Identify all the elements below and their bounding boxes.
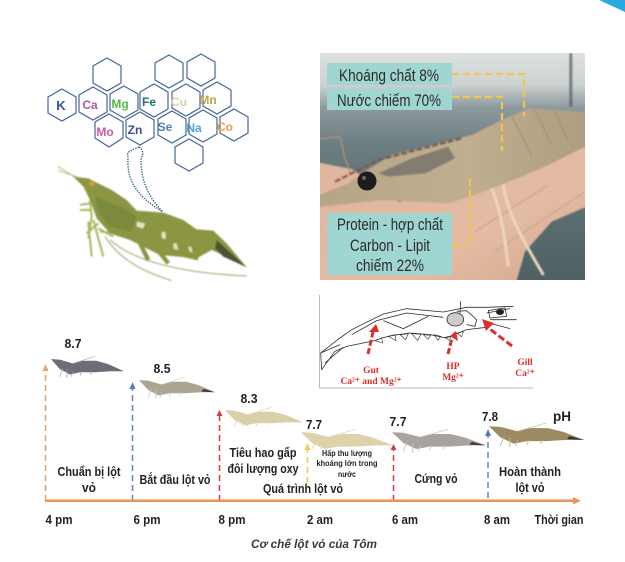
icon: shrimp 7.7 grey (392, 429, 486, 453)
dashed stage arrows (46, 369, 488, 501)
stage labels: lột vỏ (516, 481, 545, 495)
pH values: 8.5 (154, 362, 171, 376)
caption: Cơ chế lột vỏ của Tôm (251, 537, 377, 551)
panel: mineral hexagons (48, 54, 248, 171)
stage labels: Chuẩn bị lột (58, 465, 121, 479)
label: Gut (340, 366, 402, 387)
element labels: K (56, 98, 66, 113)
element labels: Mn (199, 93, 217, 107)
element labels: Co (217, 120, 233, 134)
stage labels: Tiêu hao gấp (230, 446, 297, 460)
callout: Protein (327, 213, 452, 275)
icon: shrimp 7.7 pale (301, 429, 393, 449)
stage labels: Quá trình lột vỏ (263, 482, 343, 496)
icon: prawn eye (358, 172, 376, 190)
icon: shrimp 8.5 (139, 377, 215, 399)
time labels (46, 513, 584, 527)
eye (496, 309, 504, 315)
icon: shrimp 7.8 (489, 423, 584, 447)
callout: Protein: Carbon - Lipit (350, 236, 430, 255)
icon: green shrimp (57, 166, 247, 281)
element labels: Se (158, 120, 173, 134)
callout: Protein: Protein - hợp chất (337, 215, 443, 234)
pH values: 8.7 (64, 337, 82, 351)
stage labels: nước (338, 469, 356, 479)
stage labels (58, 446, 561, 496)
stage labels: đôi lượng oxy (228, 462, 299, 476)
element labels: Zn (128, 123, 142, 137)
element labels: Na (186, 121, 202, 135)
outline (321, 306, 513, 353)
element labels: Cu (171, 95, 187, 109)
label: Gut: Gut (363, 366, 380, 376)
pH values: 7.7 (390, 415, 407, 429)
label: Gill (515, 358, 535, 379)
callout: Protein: chiếm 22% (356, 256, 424, 275)
stage labels: Hoàn thành (499, 465, 561, 479)
panel: shrimp photo (305, 53, 598, 298)
element labels: Fe (142, 95, 156, 109)
pH values: 7.8 (482, 410, 498, 424)
pH values: 8.3 (240, 392, 258, 406)
corner accent (599, 0, 625, 12)
time labels: 6 pm (134, 513, 160, 527)
label: Gill: Ca²⁺ (515, 369, 535, 379)
callout: Nước chiếm: Nước chiếm 70% (337, 91, 441, 110)
label: HP (442, 362, 464, 383)
callout: Khoáng chất: Khoáng chất 8% (339, 66, 439, 85)
icon: shrimp 8.7 (51, 356, 124, 378)
time labels: 8 am (484, 513, 510, 527)
time labels: Thời gian (534, 513, 584, 527)
pH values: pH (553, 409, 571, 424)
element labels: Mg (111, 97, 129, 111)
element labels: Ca (82, 98, 98, 112)
stage labels: khoáng lớn trong (316, 458, 378, 468)
pH values (64, 337, 571, 432)
stage labels: Hấp thu lượng (322, 448, 372, 458)
time labels: 6 am (392, 513, 418, 527)
time labels: 4 pm (46, 513, 72, 527)
label: Gut: Ca²⁺ and Mg²⁺ (340, 377, 402, 387)
label: HP: Mg²⁺ (442, 373, 464, 383)
dotted connector from Zn hexagon to shrimp (127, 147, 163, 212)
chart: moulting timeline (42, 337, 584, 527)
element labels (56, 93, 233, 139)
label: HP: HP (446, 362, 460, 372)
label: Gill: Gill (517, 358, 533, 368)
panel: shrimp anatomy diagram (320, 295, 535, 388)
icon: shrimp 8.3 (225, 407, 303, 427)
stage labels: Cứng vỏ (414, 472, 458, 486)
dashed leader lines (452, 74, 524, 245)
time labels: 2 am (307, 513, 333, 527)
element labels: Mo (96, 125, 114, 139)
time axis (45, 497, 581, 504)
stage labels: vỏ (82, 481, 96, 495)
red arrows (368, 319, 512, 354)
pH values: 7.7 (306, 418, 322, 432)
time labels: 8 pm (218, 513, 246, 527)
stage labels: Bắt đầu lột vỏ (140, 472, 211, 487)
